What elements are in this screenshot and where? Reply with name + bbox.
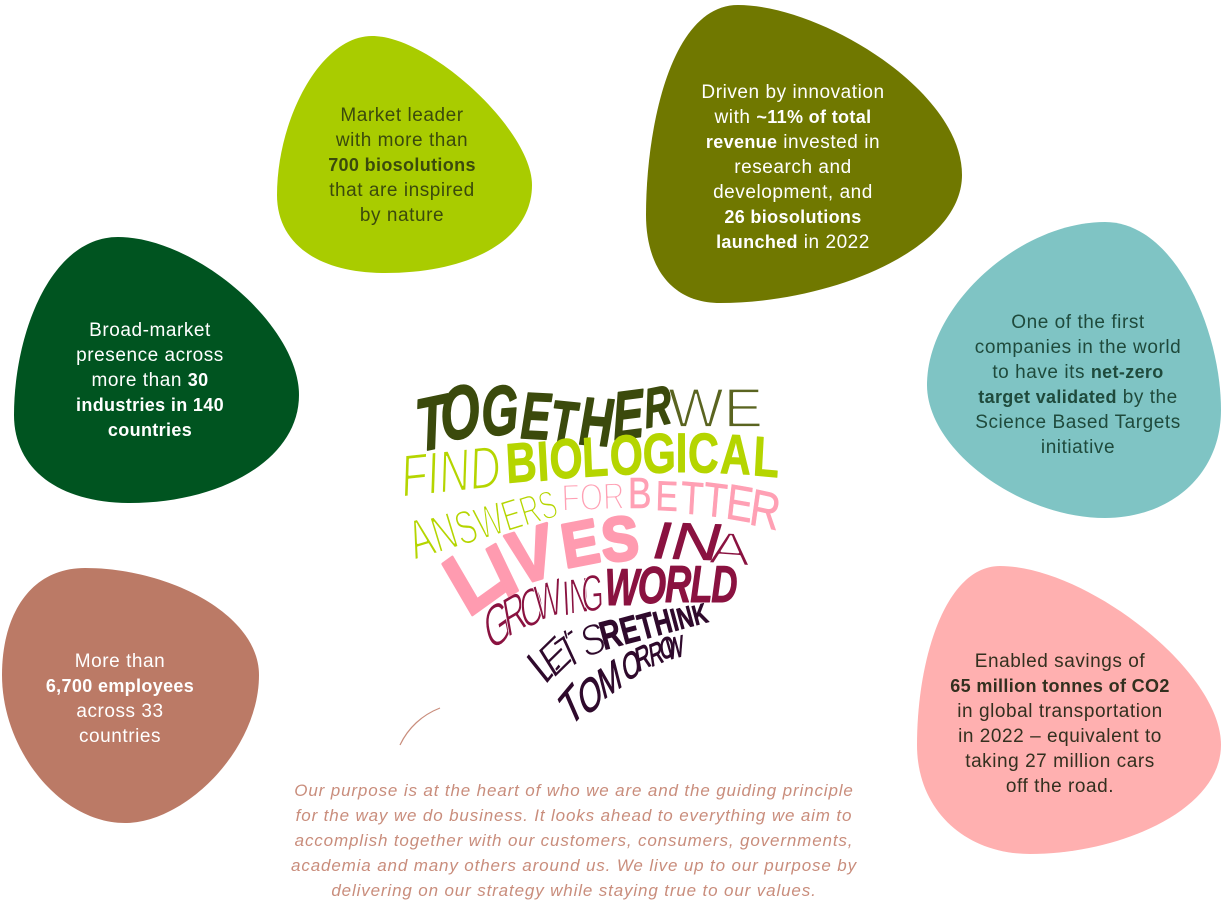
heart of words: G	[581, 563, 604, 623]
heart of words: T	[679, 471, 705, 525]
text: market leader: with more than	[335, 130, 468, 151]
heart of words: A	[707, 521, 753, 576]
heart of words: R	[641, 373, 674, 440]
heart of words: E	[520, 378, 553, 454]
heart of words: E	[557, 507, 604, 581]
heart of words: O	[517, 574, 547, 642]
heart of words: B	[628, 469, 651, 518]
text: market presence: Broad-market	[89, 320, 211, 341]
text: savings	[950, 651, 1170, 797]
text: market presence: presence across	[76, 345, 224, 366]
text: purpose statement: accomplish together with our customers, consumers, governments,	[295, 831, 853, 850]
heart of words: L	[517, 630, 569, 696]
panel: employees	[2, 568, 259, 823]
text: savings: Enabled savings of	[975, 651, 1145, 672]
text: market leader: that are inspired	[329, 180, 475, 201]
text: net-zero	[975, 312, 1181, 458]
heart of words: R	[633, 636, 653, 679]
heart of words: M	[594, 649, 626, 709]
text: purpose statement: delivering on our strategy while staying true to our values.	[331, 881, 817, 900]
heart of words: I	[561, 569, 571, 627]
heart of words: T	[549, 621, 590, 682]
text: savings: off the road.	[1006, 776, 1114, 797]
text: market presence	[76, 320, 224, 440]
text: innovation: Driven by innovation	[701, 82, 885, 103]
heart of words: FOR	[561, 476, 625, 520]
heart of words: I	[476, 529, 529, 613]
text: innovation: launched in 2022	[716, 232, 870, 253]
panel: innovation	[646, 5, 962, 303]
heart of words: T	[549, 388, 581, 460]
panel: market leader	[277, 36, 532, 273]
heart of words: G	[480, 370, 520, 451]
text: innovation: research and	[734, 157, 852, 178]
heart of words: E	[610, 375, 647, 455]
text: market presence: more than 30	[91, 370, 209, 391]
heart of words: W	[665, 630, 686, 667]
heart of words: O	[436, 367, 484, 458]
text: market presence: industries in 140	[76, 395, 224, 415]
text: purpose statement: academia and many others around us. We live up to our purpose by	[291, 856, 858, 875]
heart of words: S	[599, 504, 641, 576]
heart of words	[397, 367, 784, 739]
text: market leader: by nature	[360, 205, 444, 226]
text: employees: across 33	[76, 701, 164, 722]
text: net-zero: to have its net-zero	[992, 362, 1164, 383]
heart of words: L	[429, 522, 518, 634]
heart of words: O	[619, 641, 644, 690]
text: employees	[46, 651, 194, 747]
heart of words: ANSWERS	[400, 467, 563, 571]
text: purpose statement: for the way we do business. It looks ahead to everything we aim to	[296, 806, 852, 825]
heart of words: RETHINK	[595, 587, 712, 659]
text: employees: 6,700 employees	[46, 676, 194, 696]
heart of words: G	[479, 586, 516, 665]
text: innovation: revenue invested in	[706, 132, 880, 153]
text: net-zero: companies in the world	[975, 337, 1181, 358]
heart of words: FIND	[397, 433, 504, 510]
arc accent	[400, 708, 440, 745]
heart of words: R	[746, 477, 784, 541]
text: net-zero: One of the first	[1011, 312, 1145, 333]
text: savings: taking 27 million cars	[965, 751, 1155, 772]
heart of words: W	[532, 566, 565, 633]
heart of words: WE	[668, 376, 763, 439]
text: innovation: 26 biosolutions	[724, 207, 862, 227]
text: employees: More than	[75, 651, 165, 672]
text: savings: in 2022 – equivalent to	[958, 726, 1162, 747]
heart of words: E	[530, 624, 579, 689]
heart of words: R	[498, 577, 530, 650]
heart of words: IN	[652, 512, 722, 572]
heart of words: H	[578, 383, 615, 462]
heart of words: T	[412, 378, 454, 468]
text: employees: countries	[79, 726, 161, 747]
text: net-zero: initiative	[1041, 437, 1115, 458]
text: innovation: with ~11% of total	[714, 107, 871, 128]
text: market leader	[328, 105, 476, 226]
text: savings: 65 million tonnes of CO2	[950, 676, 1170, 696]
heart of words: O	[658, 631, 676, 667]
heart of words: T	[701, 473, 729, 529]
text: innovation	[701, 82, 885, 253]
heart of words: E	[724, 473, 756, 534]
heart of words: BIOLOGICAL	[504, 421, 781, 495]
panel: savings	[917, 566, 1221, 854]
heart of words: T	[554, 673, 590, 739]
heart of words: V	[500, 508, 563, 602]
heart of words: N	[568, 566, 590, 625]
text: innovation: development, and	[713, 182, 873, 203]
heart of words: O	[573, 663, 608, 728]
heart of words: E	[655, 474, 679, 521]
heart of words: '	[559, 621, 579, 669]
text: purpose statement	[291, 781, 858, 900]
text: market leader: 700 biosolutions	[328, 155, 476, 175]
panel: net-zero	[927, 222, 1221, 518]
text: net-zero: Science Based Targets	[975, 412, 1181, 433]
text: purpose statement: Our purpose is at the heart of who we are and the guiding principle	[294, 781, 854, 800]
heart of words: S	[577, 613, 610, 668]
text: savings: in global transportation	[957, 701, 1163, 722]
text: net-zero: target validated by the	[978, 387, 1178, 408]
heart of words: WORLD	[605, 554, 737, 617]
text: market presence: countries	[108, 420, 192, 440]
panel: market presence	[14, 237, 299, 503]
text: market leader: Market leader	[340, 105, 464, 126]
heart of words: R	[647, 633, 666, 674]
